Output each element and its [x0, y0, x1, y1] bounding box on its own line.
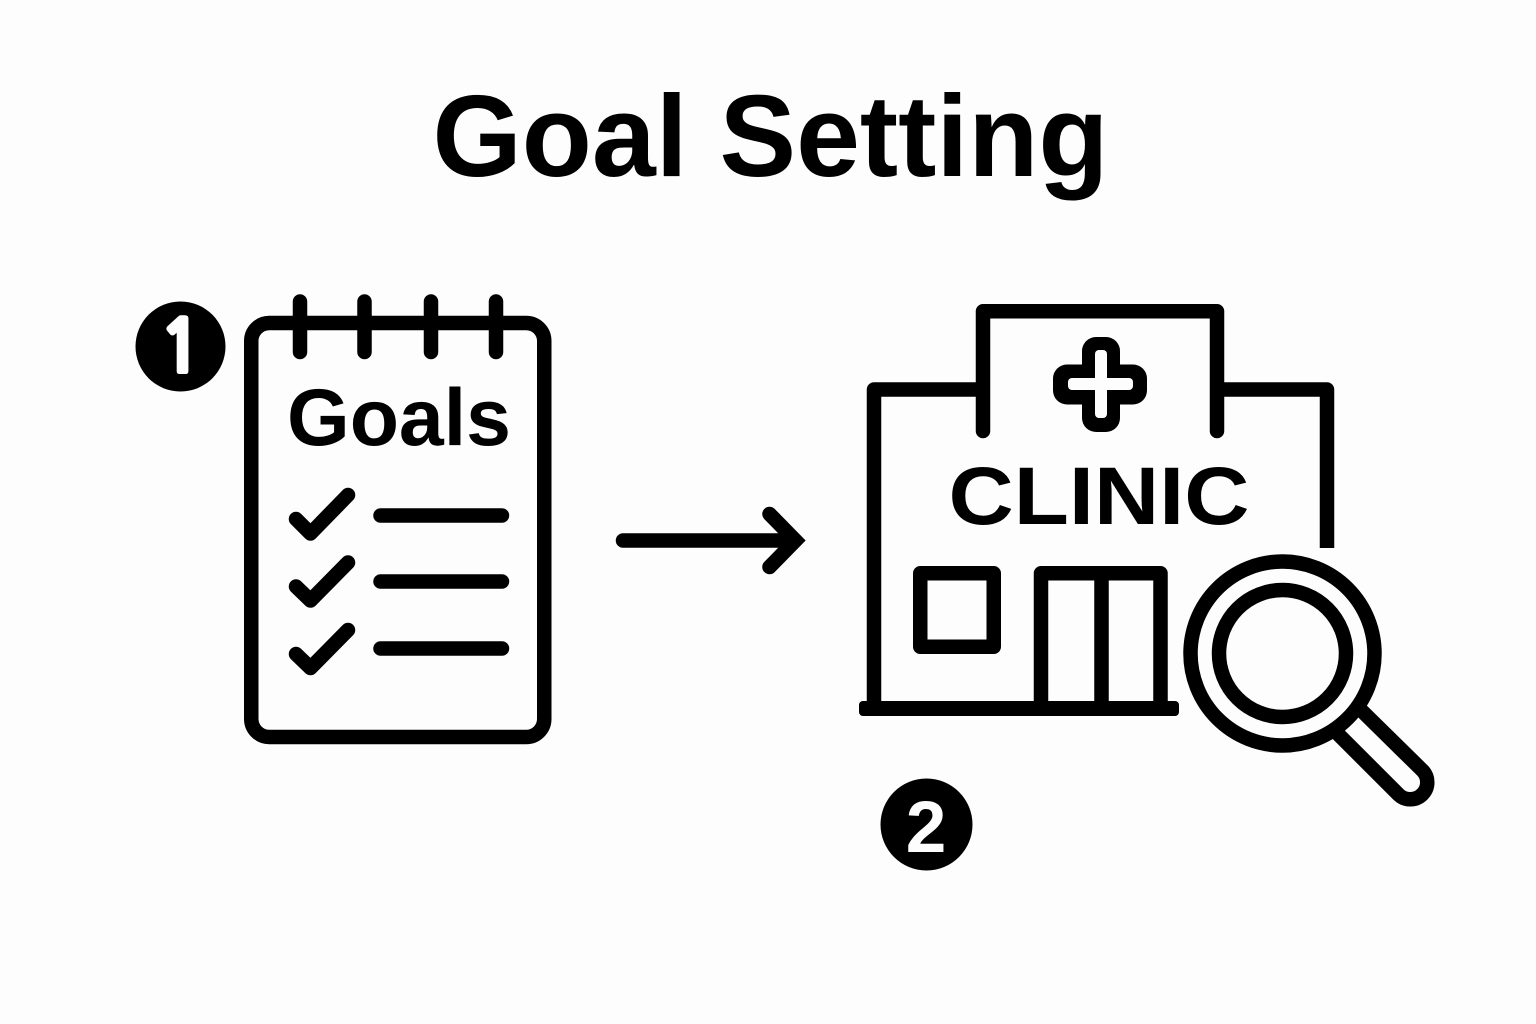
clinic label: CLINIC — [948, 451, 1250, 542]
checklist row 2 — [296, 562, 502, 600]
arrow — [623, 514, 796, 567]
icon: clinic building — [859, 311, 1327, 716]
badge 1 — [136, 302, 226, 392]
checklist row 3 — [296, 630, 502, 668]
checklist row 1 — [296, 495, 502, 534]
badge 2 — [880, 778, 972, 870]
medical cross — [1067, 350, 1133, 418]
badge 1: 1 — [159, 311, 203, 383]
icon: goals notepad — [251, 302, 544, 737]
badge 2: 2 — [906, 787, 946, 868]
icon: magnifying glass — [1190, 562, 1427, 799]
title: Goal Setting — [432, 71, 1108, 201]
door — [1041, 573, 1160, 705]
window — [920, 573, 994, 647]
notepad heading: Goals — [287, 373, 511, 463]
